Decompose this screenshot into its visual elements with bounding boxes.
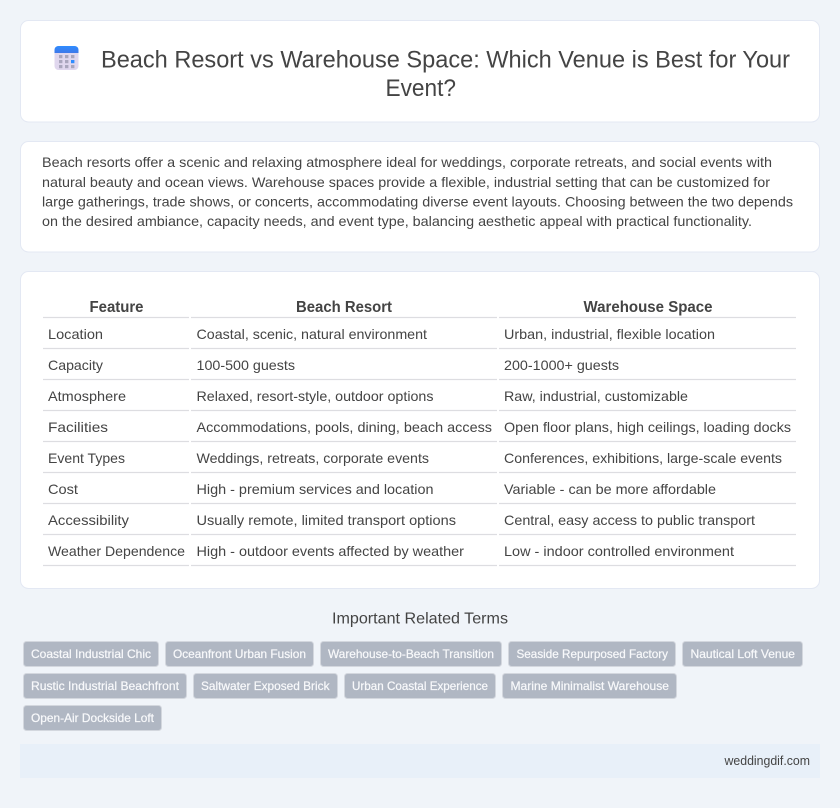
row: facilities: Accommodations, pools, dining, beach access (196, 419, 492, 435)
tag list: related terms: Nautical Loft Venue (690, 647, 795, 661)
row: event types: Weddings, retreats, corporate events (196, 450, 429, 466)
row: cost (43, 481, 796, 504)
text block: introduction paragraph: Beach resorts offer a scenic and relaxing atmosphere ideal for weddings, corporate retreats, and social events with (42, 154, 772, 170)
footer source text: weddingdif.com (724, 753, 810, 768)
row: location: Coastal, scenic, natural environment (196, 326, 427, 342)
row: capacity (43, 357, 796, 380)
row: location (43, 326, 796, 348)
row: weather dependence: Weather Dependence (48, 543, 185, 559)
row: cost: High - premium services and location (196, 481, 434, 497)
row: atmosphere (43, 388, 796, 410)
row: event types: Event Types (48, 450, 125, 466)
table header (43, 299, 796, 318)
panel: introduction (20, 142, 820, 252)
row: cost: Variable - can be more affordable (504, 481, 716, 497)
row: facilities: Facilities (48, 419, 108, 435)
row: weather dependence (43, 543, 796, 566)
tag list: related terms: Oceanfront Urban Fusion (173, 647, 306, 661)
tag list: related terms: Coastal Industrial Chic (31, 647, 151, 661)
row: location: Urban, industrial, flexible location (504, 326, 715, 342)
text block: introduction paragraph (42, 154, 793, 229)
table header: Feature (90, 299, 144, 316)
tag list: related terms: Seaside Repurposed Factory (516, 647, 668, 661)
table header: Beach Resort (296, 299, 393, 316)
title (101, 46, 790, 102)
tag list: related terms (24, 642, 802, 730)
icon: calendar (54, 46, 78, 70)
panel: title header (20, 20, 820, 122)
tag list: related terms: Marine Minimalist Warehouse (510, 679, 669, 693)
row: capacity: Capacity (48, 357, 103, 373)
row: accessibility (43, 512, 796, 534)
tag list: related terms: Open-Air Dockside Loft (31, 711, 155, 725)
row: facilities: Open floor plans, high ceilings, loading docks (504, 419, 791, 435)
row: weather dependence: High - outdoor events affected by weather (196, 543, 464, 559)
row: cost: Cost (48, 481, 78, 497)
text block: introduction paragraph: natural beauty and ocean views. Warehouse spaces provide a flexible, industrial setting that can be customized for (42, 174, 770, 190)
row: accessibility: Usually remote, limited transport options (196, 512, 456, 528)
tag list: related terms: Urban Coastal Experience (352, 679, 488, 693)
row: event types (43, 450, 796, 472)
row: facilities (43, 419, 796, 442)
footer bar (20, 744, 820, 778)
tag list: related terms: Rustic Industrial Beachfront (31, 679, 180, 693)
table header: Warehouse Space (584, 299, 713, 316)
row: accessibility: Accessibility (48, 512, 129, 528)
tag list: related terms: Warehouse-to-Beach Transition (328, 647, 494, 661)
row: event types: Conferences, exhibitions, large-scale events (504, 450, 782, 466)
title: Beach Resort vs Warehouse Space: Which Venue is Best for Your (101, 46, 790, 74)
row: capacity: 100-500 guests (196, 357, 295, 373)
row: weather dependence: Low - indoor controlled environment (504, 543, 734, 559)
title: Event? (386, 75, 456, 102)
row: accessibility: Central, easy access to public transport (504, 512, 755, 528)
text block: introduction paragraph: large gatherings, trade shows, or concerts, accommodating diverse event layouts. Choosing between the two depends (42, 194, 793, 210)
row: atmosphere: Relaxed, resort-style, outdoor options (196, 388, 434, 404)
text block: introduction paragraph: on the desired ambiance, capacity needs, and event type, balancing aesthetic appeal with practical functionality. (42, 213, 752, 229)
row: atmosphere: Atmosphere (48, 388, 126, 404)
tag list: related terms: Saltwater Exposed Brick (201, 679, 330, 693)
row: capacity: 200-1000+ guests (504, 357, 619, 373)
panel: comparison table (20, 272, 820, 588)
heading: important related terms: Important Related Terms (332, 610, 508, 628)
row: location: Location (48, 326, 103, 342)
row: atmosphere: Raw, industrial, customizable (504, 388, 688, 404)
